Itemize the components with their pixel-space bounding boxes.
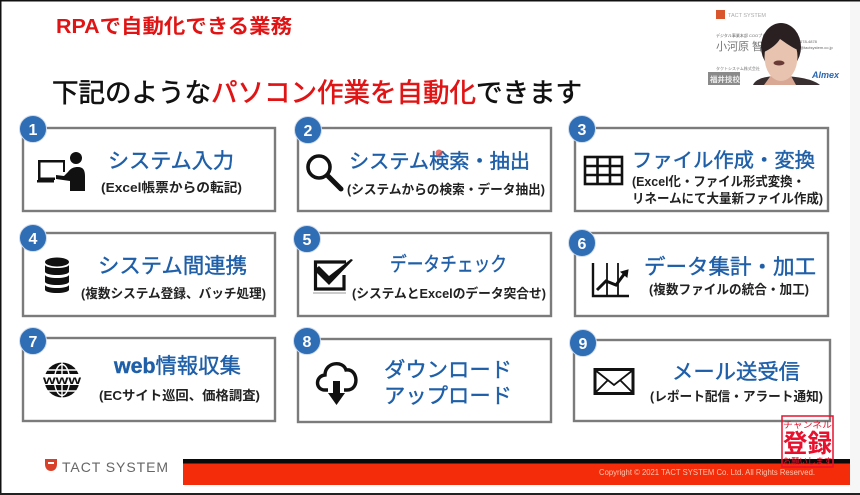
panel 2: システム検索・抽出: システム検索・抽出 (349, 150, 530, 173)
badge 5: 5 (303, 232, 312, 249)
badge 4 (20, 224, 46, 252)
badge 1 (20, 116, 46, 142)
heading: 下記のようなパソコン作業を自動化できます (52, 78, 582, 108)
webcam panel: presenter: 078-4878 (800, 39, 818, 44)
badge 7: 7 (29, 334, 38, 351)
panel 2: システム検索・抽出: (システムからの検索・データ抽出) (347, 182, 545, 197)
icon: checkbox (313, 259, 353, 294)
webcam panel: presenter: @tactsystem.co.jp (800, 45, 834, 50)
panel 8: ダウンロード アップロード: アップロード (384, 385, 512, 408)
panel 3: ファイル作成・変換: ファイル作成・変換 (632, 149, 815, 172)
badge 8 (294, 328, 320, 354)
icon: magnifier (308, 156, 341, 189)
badge 3 (568, 116, 596, 142)
icon: line chart (593, 263, 629, 296)
panel 5: データチェック: データチェック (390, 253, 507, 276)
webcam panel: presenter (690, 4, 850, 88)
badge 1: 1 (29, 122, 38, 139)
badge 2: 2 (304, 123, 313, 140)
icon: www globe (41, 362, 83, 398)
badge 8: 8 (303, 334, 312, 351)
panel 7: web情報収集: web情報収集 (113, 355, 241, 378)
icon: table grid (585, 157, 622, 184)
panel 4: システム間連携 (20, 224, 275, 316)
stamp: channel subscribe (782, 416, 833, 467)
panel 3: ファイル作成・変換: (Excel化・ファイル形式変換・ (632, 174, 805, 189)
badge 2 (294, 116, 322, 144)
badge 5 (294, 226, 320, 252)
panel 8: ダウンロード アップロード (294, 328, 551, 422)
panel 3: ファイル作成・変換 (568, 116, 828, 211)
stamp: channel subscribe: 登録 (783, 430, 832, 458)
badge 9: 9 (579, 336, 588, 353)
panel 8: ダウンロード アップロード: ダウンロード (384, 359, 512, 382)
footer logo: TACT SYSTEM (62, 459, 168, 475)
footer bar: Copyright © 2021 TACT SYSTEM Co. Ltd. All Rights Reserved. (599, 468, 815, 477)
badge 7 (20, 328, 46, 354)
panel 9: メール送受信 (570, 330, 830, 421)
icon: cloud download (318, 364, 356, 405)
title: RPAで自動化できる業務 (56, 15, 292, 38)
icon: person at computer (37, 152, 85, 191)
panel 1: システム入力 (20, 116, 275, 211)
badge 4: 4 (29, 231, 38, 248)
icon: www globe: www (42, 373, 82, 387)
pointer dot (436, 150, 442, 156)
webcam panel: presenter: デジタル事業本部 COOプレジデント (716, 32, 782, 38)
panel 6: データ集計・加工: データ集計・加工 (644, 256, 816, 279)
panel 5: データチェック (294, 226, 551, 316)
icon: database (45, 258, 69, 293)
panel 7: web情報収集: (ECサイト巡回、価格調査) (99, 388, 260, 403)
panel 1: システム入力: (Excel帳票からの転記) (101, 180, 242, 195)
panel 6: データ集計・加工 (568, 230, 828, 316)
stamp: channel subscribe: お願いします (783, 456, 832, 466)
webcam panel: presenter: TACT SYSTEM (728, 13, 766, 19)
badge 6: 6 (578, 236, 587, 253)
panel 9: メール送受信: (レポート配信・アラート通知) (650, 389, 823, 404)
panel 4: システム間連携: (複数システム登録、バッチ処理) (81, 286, 266, 301)
panel 1: システム入力: システム入力 (108, 150, 234, 173)
panel 3: ファイル作成・変換: リネームにて大量新ファイル作成) (632, 191, 823, 206)
panel 7: web情報収集 (20, 328, 275, 421)
webcam panel: presenter: タクトシステム株式会社 (716, 65, 760, 71)
panel 9: メール送受信: メール送受信 (672, 361, 800, 384)
webcam panel: presenter: 福井技校 (710, 74, 740, 84)
panel 5: データチェック: (システムとExcelのデータ突合せ) (352, 286, 546, 301)
webcam panel: presenter: Almex (811, 70, 840, 80)
panel 6: データ集計・加工: (複数ファイルの統合・加工) (649, 282, 809, 297)
icon: envelope (595, 370, 633, 394)
stamp: channel subscribe: チャンネル (783, 420, 832, 430)
footer bar (183, 459, 850, 485)
badge 9 (570, 330, 596, 356)
panel 4: システム間連携: システム間連携 (98, 255, 247, 278)
badge 6 (568, 230, 596, 256)
webcam panel: presenter: 小河原 智子 (716, 39, 774, 53)
badge 3: 3 (578, 122, 587, 139)
panel 2: システム検索・抽出 (294, 116, 551, 211)
